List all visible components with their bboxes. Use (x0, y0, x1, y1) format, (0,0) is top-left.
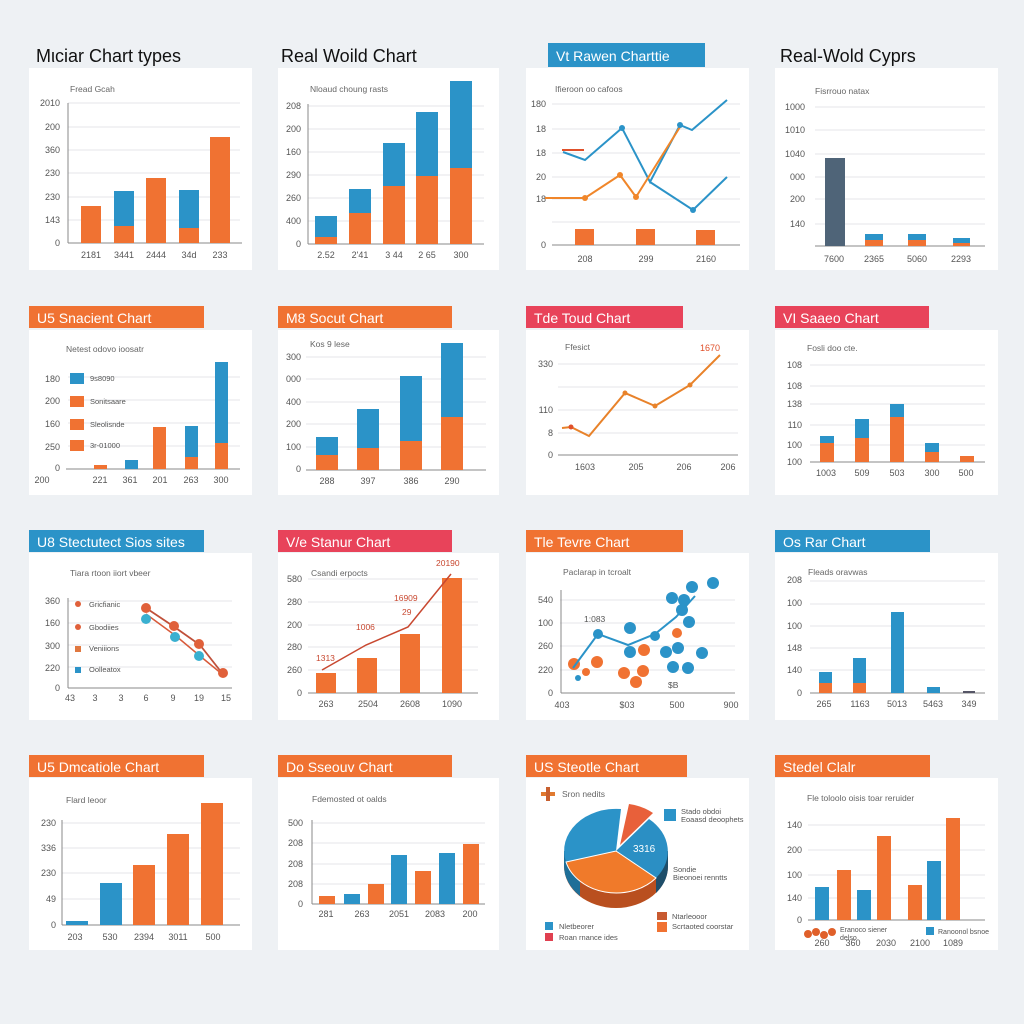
panel: r3c3 scatter chart: 1:083 (584, 614, 606, 624)
lines (141, 603, 228, 678)
panel: r4c4 bar chart: 2030 (876, 938, 896, 948)
panel: r4c2 bar chart: 200 (462, 909, 478, 919)
legend: Veniiions (89, 644, 119, 653)
panel: r1c1 bar chart (29, 46, 252, 270)
panel: r2c2 stacked bar: 290 (444, 476, 460, 486)
bars (819, 612, 975, 693)
panel: r1c2 stacked bar: 200 (286, 124, 301, 134)
legend: delso (840, 935, 857, 942)
panel: r2c2 stacked bar: 300 (286, 352, 301, 362)
panel: r4c2 bar chart: 0 (298, 899, 303, 909)
panel: r3c2 bar+line chart: 16909 (394, 593, 418, 603)
panel: r3c1 line chart with legend: 9 (170, 693, 176, 703)
panel: r4c4 bar chart: 100 (787, 870, 802, 880)
panel: r4c1 bar chart: 230 (41, 868, 56, 878)
panel: r3c1 line chart with legend: 3 (118, 693, 124, 703)
panel: r2c2 stacked bar: 400 (286, 397, 301, 407)
panel: r4c4 bar chart: 2100 (910, 938, 930, 948)
panel: r2c2 stacked bar: M8 Socut Chart (286, 310, 383, 326)
panel: r4c1 bar chart: 530 (102, 932, 118, 942)
panel: r1c4 bar chart: 7600 (824, 254, 844, 264)
panel: r1c4 bar chart: 2365 (864, 254, 884, 264)
panel: r2c2 stacked bar: 200 (286, 419, 301, 429)
header (526, 306, 683, 328)
legend: 9s8090 (90, 374, 115, 383)
header (775, 530, 930, 552)
panel: r4c1 bar chart: 203 (67, 932, 83, 942)
panel: r3c3 scatter chart: 900 (723, 700, 739, 710)
panel: r2c4 stacked bar: 300 (924, 468, 940, 478)
header (278, 530, 452, 552)
panel: r3c1 line chart with legend: 43 (65, 693, 75, 703)
panel: r1c2 stacked bar: 2 65 (418, 250, 436, 260)
panel: r2c4 stacked bar: 100 (787, 440, 802, 450)
panel: r3c3 scatter chart: 0 (548, 688, 553, 698)
panel: r1c4 bar chart (775, 46, 998, 270)
panel: r4c1 bar chart: U5 Dmcatiole Chart (37, 759, 159, 775)
legend: Sondie (673, 865, 696, 874)
panel: r4c4 bar chart: 0 (797, 915, 802, 925)
panel: r2c3 line chart: Tde Toud Chart (534, 310, 630, 326)
pie: 3316 (633, 844, 656, 855)
panel: r3c2 bar+line chart: Csandi erpocts (311, 568, 368, 578)
panel: r1c3 line chart: 18 (536, 194, 546, 204)
panel: r3c2 bar+line chart (278, 530, 499, 720)
panel: r3c4 bar chart: 5463 (923, 699, 943, 709)
panel: r3c1 line chart with legend: 6 (143, 693, 149, 703)
panel: r4c4 bar chart: 200 (787, 845, 802, 855)
panel: r2c1 legend bar chart: 160 (45, 419, 60, 429)
panel: r2c3 line chart: 1603 (575, 462, 595, 472)
panel: r3c1 line chart with legend: 15 (221, 693, 231, 703)
panel: r3c4 bar chart: 0 (797, 688, 802, 698)
panel: r1c1 bar chart: 200 (45, 122, 60, 132)
panel: r1c4 bar chart: 1000 (785, 102, 805, 112)
panel: r2c1 legend bar chart: 180 (45, 374, 60, 384)
panel: r2c3 line chart: 206 (676, 462, 692, 472)
panel: r1c4 bar chart: 1040 (785, 149, 805, 159)
header (278, 306, 452, 328)
panel: r4c2 bar chart: 2051 (389, 909, 409, 919)
title: Real Woild Chart (281, 46, 417, 66)
panel: r3c3 scatter chart: $03 (619, 700, 635, 710)
panel: r3c2 bar+line chart: 280 (287, 642, 302, 652)
panel: r1c1 bar chart: 3441 (114, 250, 134, 260)
bars (81, 137, 230, 243)
panel: r4c2 bar chart: 208 (288, 859, 303, 869)
panel: r3c4 bar chart: 100 (787, 598, 802, 608)
panel: r4c4 bar chart: 360 (845, 938, 861, 948)
panel: r3c3 scatter chart: 403 (554, 700, 570, 710)
bars (575, 229, 715, 245)
panel: r1c2 stacked bar: 260 (286, 193, 301, 203)
legend: Eoaasd deoophets (681, 815, 744, 824)
header (29, 530, 204, 552)
panel: r4c2 bar chart: 281 (318, 909, 334, 919)
header (526, 530, 683, 552)
panel: r1c4 bar chart: 000 (790, 172, 805, 182)
header (775, 755, 930, 777)
panel: r1c3 line chart (526, 43, 749, 270)
panel: r3c1 line chart with legend: 360 (45, 596, 60, 606)
panel: r2c1 legend bar chart: 263 (183, 475, 199, 485)
trend line (322, 574, 451, 670)
panel: r4c4 bar chart: 1089 (943, 938, 963, 948)
legend (545, 807, 744, 942)
panel: r1c1 bar chart: 2444 (146, 250, 166, 260)
panel: r3c1 line chart with legend: 160 (45, 618, 60, 628)
panel: r2c2 stacked bar: 000 (286, 374, 301, 384)
panel: r2c1 legend bar chart: 300 (213, 475, 229, 485)
panel: r1c2 stacked bar: 2.52 (317, 250, 335, 260)
panel: r2c1 legend bar chart (29, 306, 252, 495)
header (548, 43, 705, 67)
panel: r1c3 line chart: 18 (536, 124, 546, 134)
panel: r1c4 bar chart: 5060 (907, 254, 927, 264)
panel: r2c4 stacked bar: 110 (788, 420, 802, 430)
panel: r3c4 bar chart: 1163 (850, 699, 870, 709)
line (562, 355, 720, 436)
pie (564, 804, 668, 908)
panel: r4c4 bar chart (775, 755, 998, 950)
panel: r3c2 bar+line chart: 1090 (442, 699, 462, 709)
bars (94, 362, 228, 469)
panel: r2c3 line chart: 110 (539, 405, 553, 415)
panel: r3c4 bar chart: Os Rar Chart (783, 534, 866, 550)
panel: r3c2 bar+line chart: 580 (287, 574, 302, 584)
panel: r1c1 bar chart: Fread Gcah (70, 84, 115, 94)
panel: r3c1 line chart with legend: 0 (55, 683, 60, 693)
panel: r1c2 stacked bar: 3 44 (385, 250, 403, 260)
panel: r1c2 stacked bar: 160 (286, 147, 301, 157)
panel: r2c4 stacked bar: 1003 (816, 468, 836, 478)
bars (315, 81, 472, 244)
panel: r2c3 line chart: 0 (548, 450, 553, 460)
panel: r4c4 bar chart: Fle toloolo oisis toar reruider (807, 793, 914, 803)
panel: r1c2 stacked bar (278, 46, 499, 270)
panel: r4c1 bar chart: 336 (41, 843, 56, 853)
legend: Oolleatox (89, 665, 121, 674)
panel: r4c3 pie chart: US Steotle Chart (534, 759, 639, 775)
legend: Gricfianic (89, 600, 121, 609)
panel: r2c3 line chart (526, 306, 749, 495)
panel: r4c1 bar chart: 0 (51, 920, 56, 930)
header (278, 755, 452, 777)
panel: r2c4 stacked bar: 138 (787, 399, 802, 409)
panel: r1c4 bar chart: Fisrrouo natax (815, 86, 870, 96)
panel: r3c4 bar chart (775, 530, 998, 720)
panel: r1c3 line chart: 20 (536, 172, 546, 182)
panel: r2c2 stacked bar: 386 (403, 476, 419, 486)
panel: r2c1 legend bar chart: 250 (45, 442, 60, 452)
panel: r3c4 bar chart: 5013 (887, 699, 907, 709)
panel: r1c4 bar chart: 2293 (951, 254, 971, 264)
panel: r3c2 bar+line chart: 260 (287, 665, 302, 675)
scatter (568, 577, 719, 688)
panel: r2c4 stacked bar: VI Saaeo Chart (783, 310, 879, 326)
panel: r2c4 stacked bar: 100 (787, 457, 802, 467)
title: Real-Wold Cyprs (780, 46, 916, 66)
panel: r4c2 bar chart (278, 755, 499, 950)
panel: r1c1 bar chart: 143 (45, 215, 60, 225)
panel: r4c1 bar chart: 500 (205, 932, 221, 942)
icon: small cross (541, 787, 555, 801)
panel: r4c1 bar chart (29, 755, 252, 950)
panel: r1c3 line chart: 180 (531, 99, 546, 109)
panel: r4c2 bar chart: 208 (288, 838, 303, 848)
panel: r1c4 bar chart: 140 (790, 219, 805, 229)
legend: Bieonoei renntts (673, 873, 727, 882)
panel: r2c4 stacked bar: 108 (787, 381, 802, 391)
panel: r4c4 bar chart: 260 (814, 938, 830, 948)
panel: r2c3 line chart: 1670 (700, 343, 720, 353)
panel: r4c2 bar chart: Do Sseouv Chart (286, 759, 393, 775)
panel: r1c3 line chart: 299 (638, 254, 654, 264)
panel: r2c3 line chart: 8 (548, 428, 553, 438)
panel: r2c3 line chart: 205 (628, 462, 644, 472)
panel: r2c1 legend bar chart: 361 (122, 475, 138, 485)
panel: r3c4 bar chart: 140 (787, 665, 802, 675)
bars (825, 158, 970, 246)
panel: r1c1 bar chart: 230 (45, 168, 60, 178)
panel: r3c1 line chart with legend: 19 (194, 693, 204, 703)
legend: 3r-01000 (90, 441, 120, 450)
panel: r2c2 stacked bar: Kos 9 lese (310, 339, 350, 349)
panel: r2c4 stacked bar: 500 (958, 468, 974, 478)
bars (316, 578, 462, 693)
panel: r4c2 bar chart: Fdemosted ot oalds (312, 794, 387, 804)
panel: r3c2 bar+line chart: 1313 (316, 653, 335, 663)
panel: r3c1 line chart with legend: 220 (45, 663, 60, 673)
panel: r1c2 stacked bar: Nloaud choung rasts (310, 84, 388, 94)
header (526, 755, 687, 777)
panel: r3c3 scatter chart: $B (668, 680, 679, 690)
panel: r1c3 line chart: 2160 (696, 254, 716, 264)
panel: r3c4 bar chart: 148 (787, 643, 802, 653)
legend: Eranoco siener (840, 927, 888, 934)
panel: r1c3 line chart: 208 (577, 254, 593, 264)
panel: r3c2 bar+line chart: 280 (287, 597, 302, 607)
panel: r3c2 bar+line chart: 200 (287, 620, 302, 630)
legend: Nletbeorer (559, 922, 595, 931)
panel: r2c1 legend bar chart: 200 (45, 396, 60, 406)
panel: r1c1 bar chart: 230 (45, 192, 60, 202)
panel: r3c2 bar+line chart: 0 (297, 688, 302, 698)
panel: r2c4 stacked bar: 108 (787, 360, 802, 370)
panel: r4c1 bar chart: Flard leoor (66, 795, 107, 805)
panel: r1c1 bar chart: 34d (181, 250, 197, 260)
legend: Roan rnance ides (559, 933, 618, 942)
panel: r1c2 stacked bar: 300 (453, 250, 469, 260)
panel: r2c2 stacked bar (278, 306, 499, 495)
panel: r2c2 stacked bar: 0 (296, 464, 301, 474)
legend: Stado obdoi (681, 807, 721, 816)
panel: r2c4 stacked bar: 503 (889, 468, 905, 478)
panel: r4c4 bar chart: 140 (787, 820, 802, 830)
panel: r3c4 bar chart: 349 (961, 699, 977, 709)
panel: r3c4 bar chart: Fleads oravwas (808, 567, 868, 577)
panel: r3c3 scatter chart: 100 (538, 618, 553, 628)
panel: r1c1 bar chart: 360 (45, 145, 60, 155)
panel: r3c2 bar+line chart: 20190 (436, 558, 460, 568)
panel: r2c2 stacked bar: 397 (360, 476, 376, 486)
panel: r1c1 bar chart: 2010 (40, 98, 60, 108)
panel: r1c3 line chart: 18 (536, 148, 546, 158)
legend (70, 373, 126, 451)
panel: r2c1 legend bar chart: 221 (92, 475, 108, 485)
panel: r1c3 line chart: Vt Rawen Charttie (556, 48, 670, 64)
panel: r4c2 bar chart: 500 (288, 818, 303, 828)
legend: Scrtaoted coorstar (672, 922, 734, 931)
panel: r4c3 pie chart (526, 755, 749, 950)
panel: r3c3 scatter chart: 540 (538, 595, 553, 605)
panel: r1c2 stacked bar: 290 (286, 170, 301, 180)
panel: r4c1 bar chart: 2394 (134, 932, 154, 942)
panel: r1c3 line chart: 0 (541, 240, 546, 250)
panel: r2c4 stacked bar (775, 306, 998, 495)
panel: r4c4 bar chart: 140 (787, 893, 802, 903)
panel: r1c2 stacked bar: 208 (286, 101, 301, 111)
panel: r3c1 line chart with legend: 300 (45, 641, 60, 651)
panel: r4c3 pie chart: Sron nedits (562, 789, 605, 799)
legend: Ntarleooor (672, 912, 708, 921)
panel: r3c3 scatter chart (526, 530, 749, 720)
legend: Ranoonol bsnoe (938, 929, 989, 936)
panel: r4c4 bar chart: Stedel Clalr (783, 759, 856, 775)
panel: r1c2 stacked bar: 400 (286, 216, 301, 226)
panel: r4c1 bar chart: 230 (41, 818, 56, 828)
legend (804, 927, 989, 942)
bars (815, 818, 960, 920)
panel: r3c4 bar chart: 100 (787, 621, 802, 631)
bars (66, 803, 223, 925)
legend: Sleolisnde (90, 420, 125, 429)
panel: r1c3 line chart: Ifieroon oo cafoos (555, 84, 623, 94)
panel: r2c3 line chart: 330 (538, 359, 553, 369)
panel: r2c2 stacked bar: 288 (319, 476, 335, 486)
panel: r4c2 bar chart: 2083 (425, 909, 445, 919)
panel: r2c1 legend bar chart: U5 Snacient Chart (37, 310, 152, 326)
panel: r3c1 line chart with legend: Tiara rtoon iiort vbeer (70, 568, 151, 578)
panel: r4c2 bar chart: 208 (288, 879, 303, 889)
panel: r2c3 line chart: 206 (720, 462, 736, 472)
panel: r2c3 line chart: Ffesict (565, 342, 591, 352)
legend (75, 600, 121, 674)
panel: r2c4 stacked bar: Fosli doo cte. (807, 343, 858, 353)
panel: r2c2 stacked bar: 100 (286, 442, 301, 452)
panel: r4c2 bar chart: 263 (354, 909, 370, 919)
panel: r3c3 scatter chart: Paclarap in tcroalt (563, 567, 632, 577)
panel: r1c4 bar chart: 200 (790, 194, 805, 204)
panel: r3c4 bar chart: 208 (787, 575, 802, 585)
header (775, 306, 929, 328)
legend: Sonitsaare (90, 397, 126, 406)
lines (545, 100, 727, 213)
panel: r3c3 scatter chart: 260 (538, 641, 553, 651)
panel: r1c1 bar chart: 2181 (81, 250, 101, 260)
panel: r4c1 bar chart: 3011 (168, 932, 188, 942)
panel: r3c2 bar+line chart: 2504 (358, 699, 378, 709)
panel: r3c1 line chart with legend: U8 Stectutect Sios sites (37, 534, 185, 550)
panel: r2c1 legend bar chart: 200 (34, 475, 50, 485)
panel: r1c1 bar chart: 0 (55, 238, 60, 248)
panel: r1c1 bar chart: 233 (212, 250, 228, 260)
bars (820, 404, 974, 462)
header (29, 306, 204, 328)
bars (316, 343, 463, 470)
title: Mιciar Chart types (36, 46, 181, 66)
panel: r3c2 bar+line chart: 2608 (400, 699, 420, 709)
panel: r1c2 stacked bar: 0 (296, 239, 301, 249)
panel: r3c2 bar+line chart: 29 (402, 607, 412, 617)
panel: r1c2 stacked bar: 2'41 (352, 250, 368, 260)
panel: r4c1 bar chart: 49 (46, 894, 56, 904)
panel: r3c2 bar+line chart: 1006 (356, 622, 375, 632)
panel: r3c3 scatter chart: 500 (669, 700, 685, 710)
panel: r2c4 stacked bar: 509 (854, 468, 870, 478)
panel: r3c2 bar+line chart: 263 (318, 699, 334, 709)
panel: r3c1 line chart with legend (29, 530, 252, 720)
panel: r3c2 bar+line chart: V/e Stanur Chart (286, 534, 390, 550)
panel: r2c1 legend bar chart: 201 (152, 475, 168, 485)
panel: r1c4 bar chart: 1010 (785, 125, 805, 135)
bars (319, 844, 479, 904)
panel: r3c1 line chart with legend: 3 (92, 693, 98, 703)
panel: r2c1 legend bar chart: Netest odovo ioosatr (66, 344, 144, 354)
panel: r2c1 legend bar chart: 0 (55, 463, 60, 473)
panel: r3c3 scatter chart: Tle Tevre Chart (534, 534, 630, 550)
legend: Gbodiies (89, 623, 119, 632)
panel: r3c4 bar chart: 265 (816, 699, 832, 709)
header (29, 755, 204, 777)
panel: r3c3 scatter chart: 220 (538, 665, 553, 675)
